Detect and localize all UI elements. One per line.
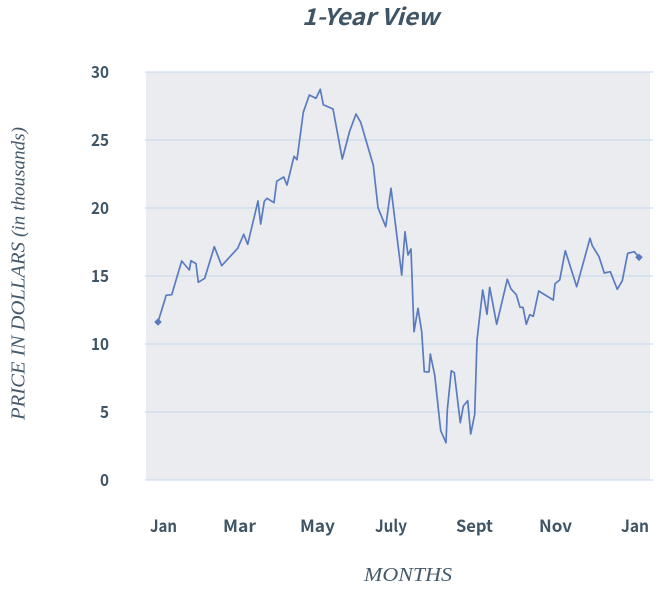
y-axis tick labels: 30 bbox=[91, 59, 109, 83]
y-axis title bbox=[8, 127, 30, 421]
x-axis month labels: Nov bbox=[539, 513, 573, 537]
x-axis month labels: Mar bbox=[223, 513, 257, 537]
x-axis month labels bbox=[150, 513, 649, 537]
x-axis month labels: Sept bbox=[456, 513, 493, 537]
plot background bbox=[146, 72, 650, 480]
y-axis tick labels bbox=[91, 59, 109, 491]
x-axis title: MONTHS bbox=[363, 564, 452, 586]
y-axis tick labels: 10 bbox=[91, 331, 109, 355]
y-axis tick labels: 20 bbox=[91, 195, 109, 219]
y-axis tick labels: 5 bbox=[100, 399, 109, 423]
end marker bbox=[635, 254, 643, 261]
start marker bbox=[154, 318, 162, 326]
x-axis month labels: July bbox=[375, 513, 407, 537]
y-axis title: PRICE IN DOLLARS bbox=[8, 242, 30, 421]
x-axis month labels: Jan bbox=[621, 513, 649, 537]
price line bbox=[158, 89, 639, 443]
x-axis month labels: May bbox=[300, 513, 336, 537]
x-axis month labels: Jan bbox=[150, 513, 177, 537]
y-axis tick labels: 15 bbox=[91, 263, 109, 287]
y-axis tick labels: 25 bbox=[91, 127, 109, 151]
y-axis tick labels: 0 bbox=[100, 467, 109, 491]
y-axis title: (in thousands) bbox=[8, 127, 30, 237]
